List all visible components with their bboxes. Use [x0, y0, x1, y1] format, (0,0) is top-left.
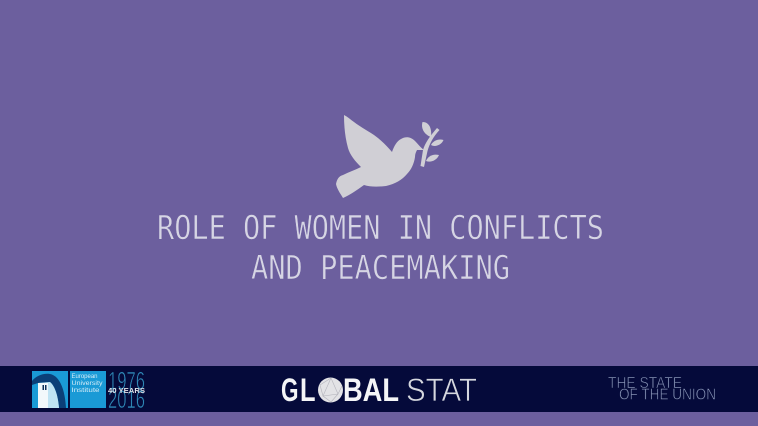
- EUI name block: Institute: [72, 388, 100, 394]
- logo: The State of the Union: OF THE UNION: [619, 386, 716, 404]
- EUI name block: [70, 371, 106, 408]
- wordmark bold GL: G: [281, 372, 298, 408]
- logo: The State of the Union: [608, 375, 716, 404]
- anniversary years: 2016: [108, 386, 145, 414]
- anniversary years: [108, 368, 145, 414]
- EUI name block: European: [72, 374, 98, 380]
- logo: GlobalStat: [281, 372, 477, 408]
- wordmark light STAT: STAT: [406, 372, 477, 408]
- title line 2: AND PEACEMAKING: [251, 248, 510, 287]
- logo: European University Institute: [32, 368, 145, 414]
- icon: globe: [318, 378, 343, 402]
- 40 years label: 40 YEARS: [108, 386, 145, 395]
- logo: The State of the Union: THE STATE: [608, 375, 682, 392]
- footer band: [0, 366, 758, 412]
- wordmark bold GL: L: [300, 372, 316, 408]
- title: [157, 208, 604, 287]
- EUI name block: University: [72, 381, 102, 387]
- wordmark bold BAL: BAL: [343, 372, 399, 408]
- title line 1: ROLE OF WOMEN IN CONFLICTS: [157, 208, 604, 247]
- anniversary years: 1976: [108, 368, 145, 396]
- icon: EUI building arch: [32, 371, 68, 408]
- icon: dove with olive branch: [336, 115, 444, 198]
